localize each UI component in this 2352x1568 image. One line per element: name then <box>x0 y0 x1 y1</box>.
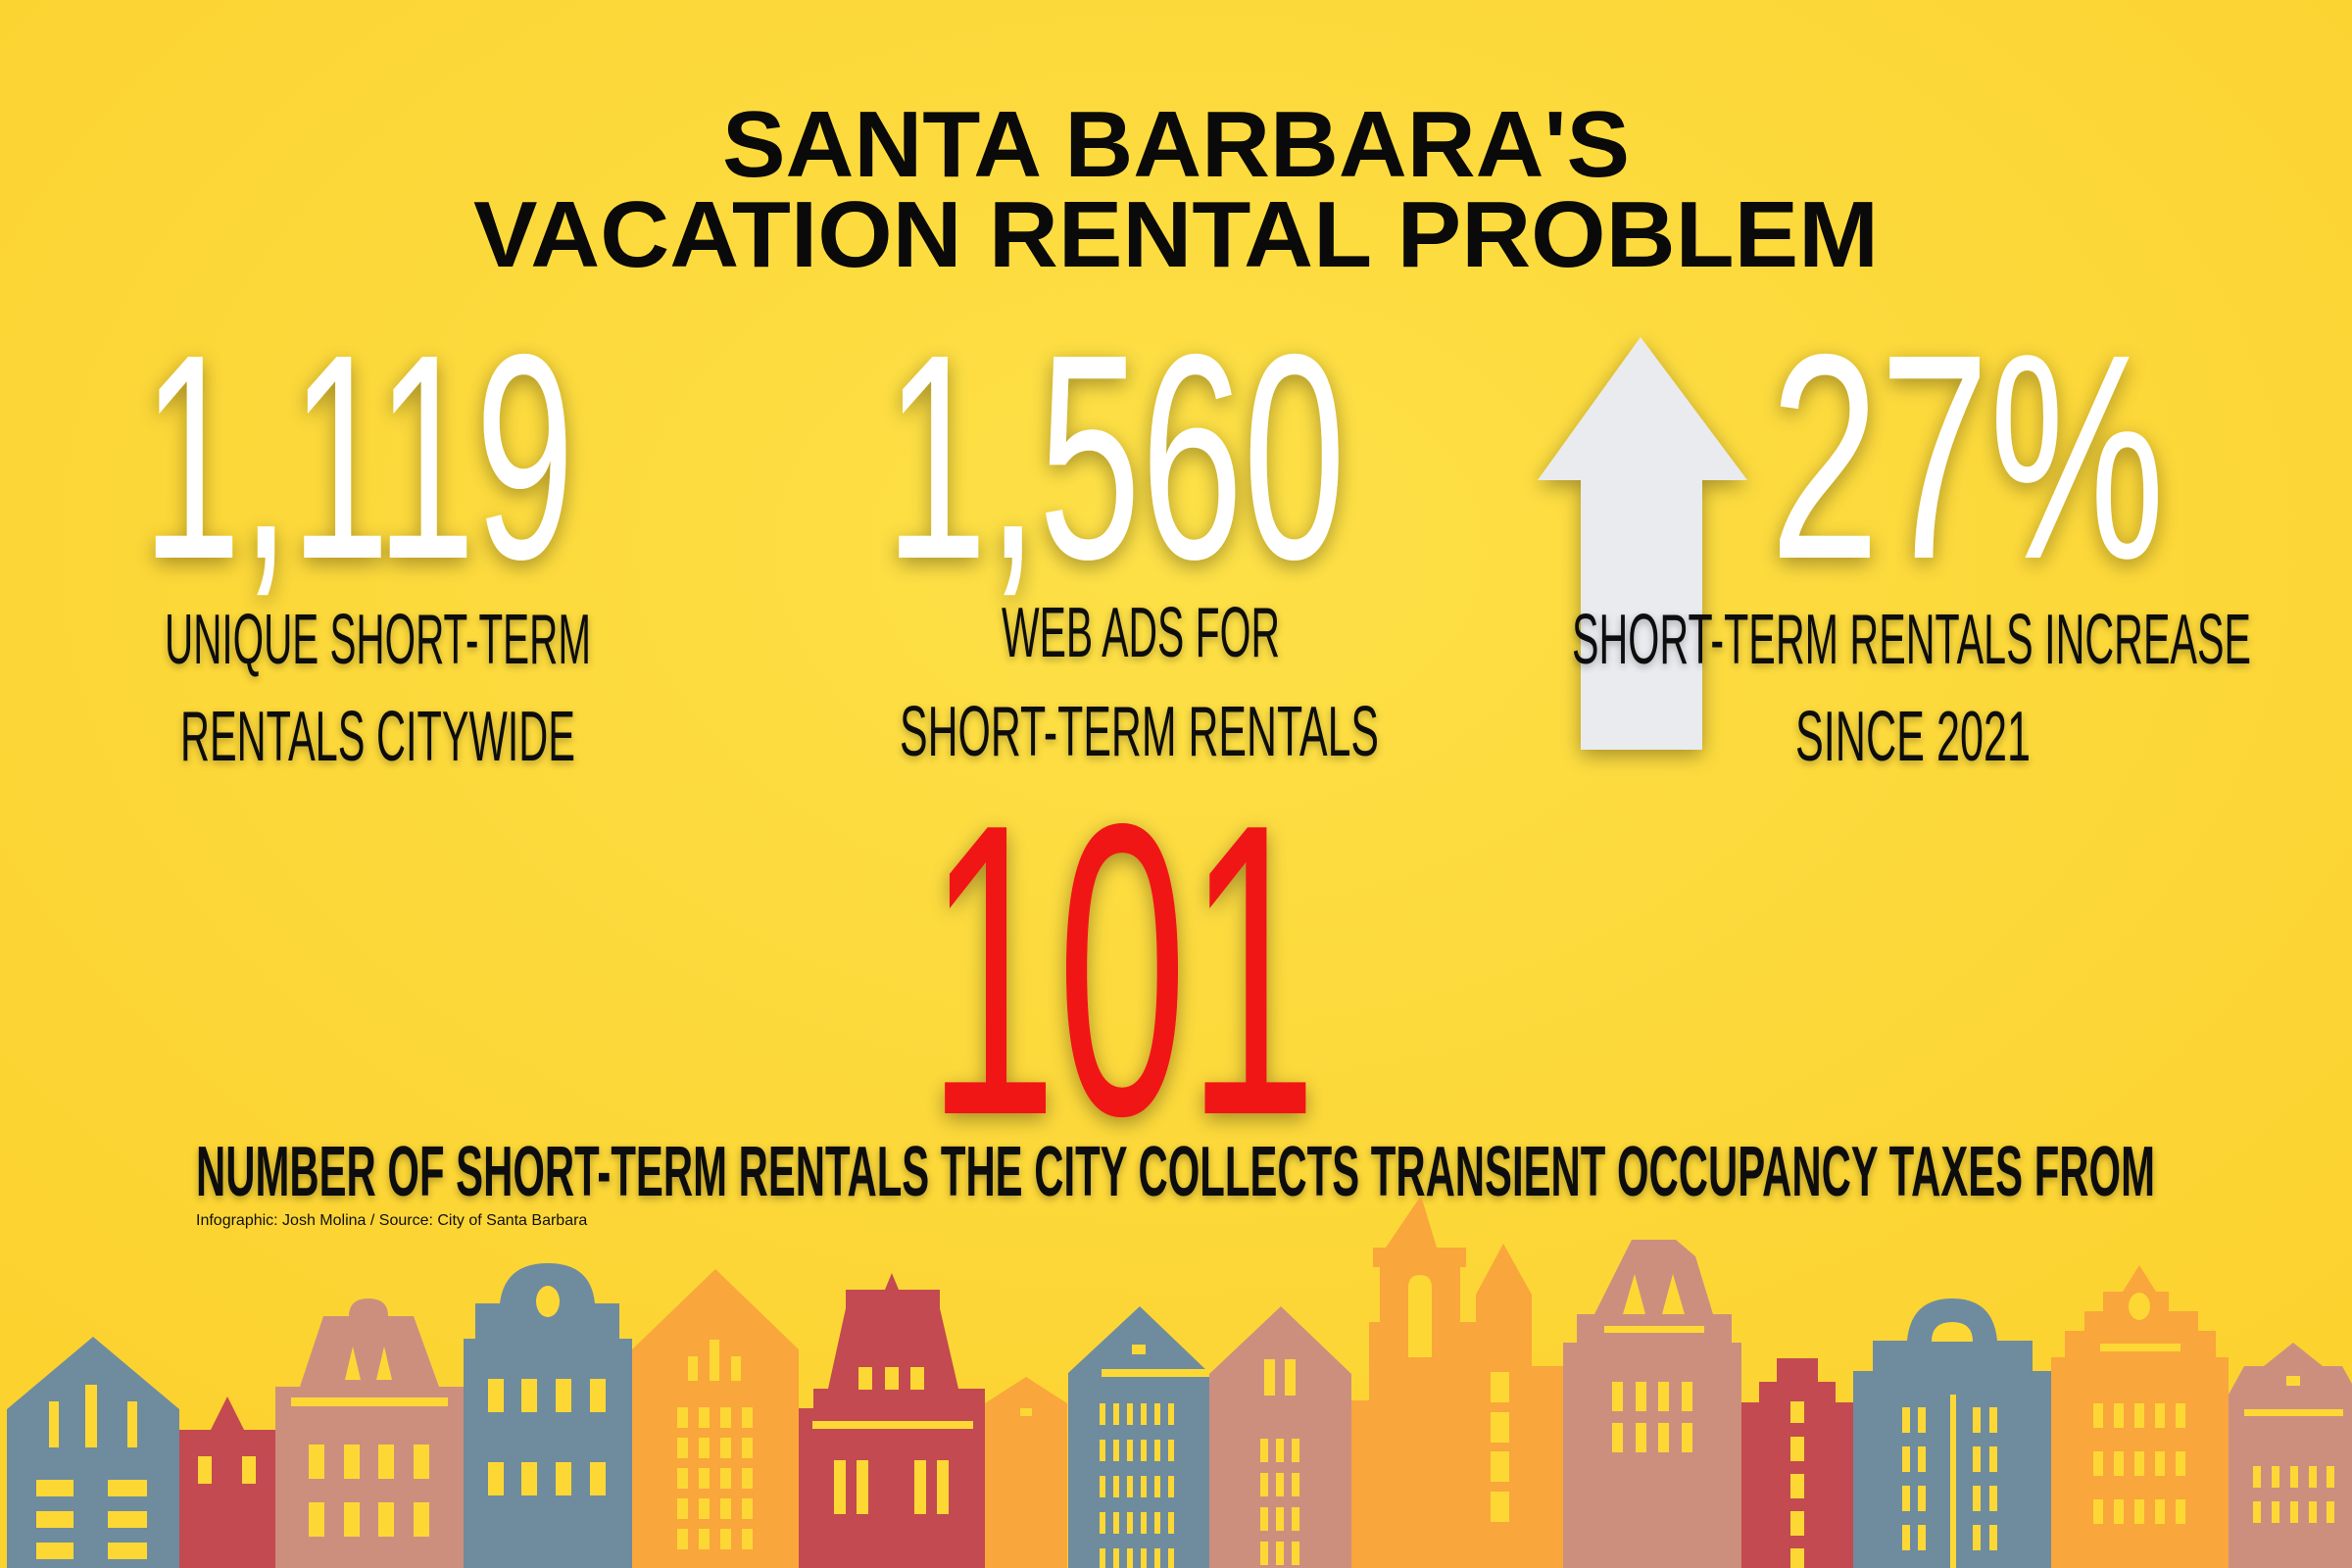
building 10 orange tower <box>1351 1196 1563 1568</box>
label: unique short-term rentals: RENTALS CITYWIDE <box>180 698 575 776</box>
building 5 orange <box>632 1269 799 1568</box>
stat: 1,119: 1,119 <box>142 294 574 620</box>
stat: 101: 101 <box>927 737 1317 1201</box>
label: web ads: WEB ADS FOR <box>1002 594 1280 672</box>
stat: 1,560: 1,560 <box>885 294 1346 620</box>
building 13 blue <box>1853 1298 2051 1568</box>
label: web ads: SHORT-TERM RENTALS <box>900 693 1379 771</box>
title: SANTA BARBARA'S <box>722 92 1630 197</box>
skyline buildings <box>7 1196 2352 1568</box>
building 15 pink <box>2229 1343 2352 1568</box>
label: increase since 2021: SINCE 2021 <box>1795 698 2031 776</box>
label: unique short-term rentals <box>165 601 591 776</box>
building 11 pink <box>1563 1240 1741 1568</box>
building 9 pink <box>1209 1306 1351 1568</box>
building 7 orange <box>985 1377 1067 1568</box>
building 6 red <box>799 1273 985 1568</box>
building 1 blue <box>7 1337 179 1568</box>
building 2 red <box>179 1396 275 1568</box>
label: unique short-term rentals: UNIQUE SHORT-TERM <box>165 601 591 679</box>
building 14 orange <box>2051 1265 2229 1568</box>
label: web ads <box>900 594 1379 771</box>
label: increase since 2021 <box>1572 601 2251 776</box>
building 4 blue <box>464 1263 632 1568</box>
building 12 red <box>1741 1358 1853 1568</box>
title <box>473 92 1879 287</box>
title: VACATION RENTAL PROBLEM <box>473 182 1879 287</box>
stat: 27%: 27% <box>1770 294 2165 620</box>
building 3 pink <box>275 1298 464 1568</box>
building 8 blue <box>1068 1306 1209 1568</box>
icon: up arrow <box>1538 337 1747 750</box>
credit: Infographic: Josh Molina / Source: City of Santa Barbara <box>196 1212 587 1229</box>
